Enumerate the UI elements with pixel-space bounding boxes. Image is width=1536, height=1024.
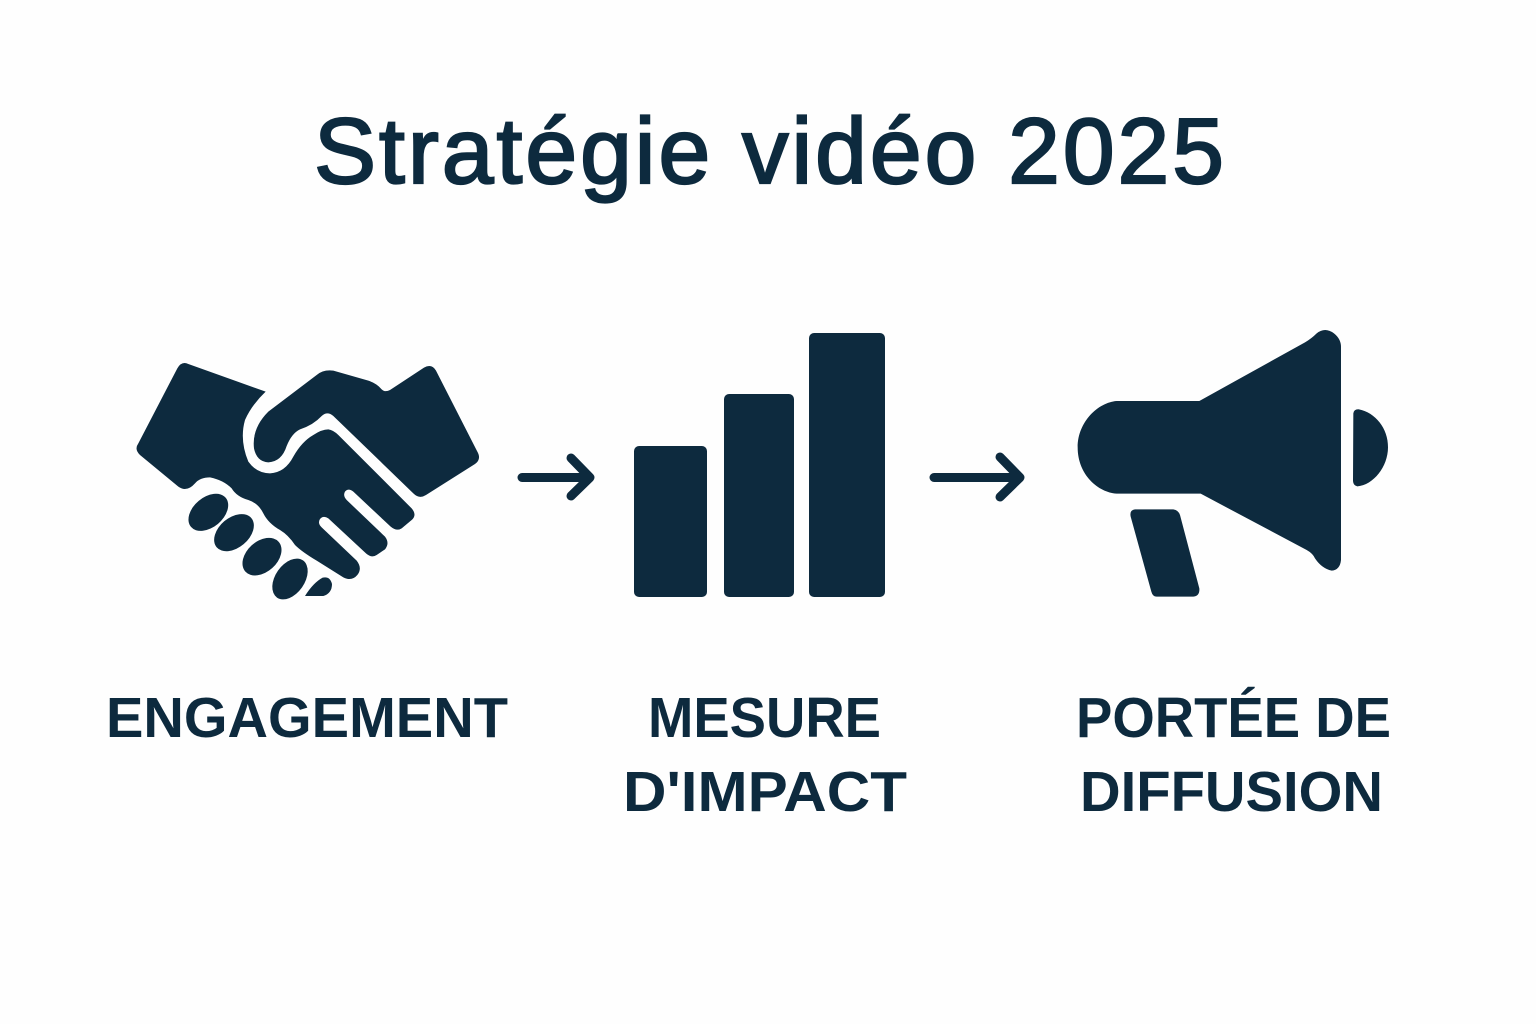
icon: handshake [137, 363, 479, 606]
arrow: engagement to impact [522, 458, 590, 496]
title: Stratégie vidéo 2025 [314, 99, 1224, 203]
finger 1 [181, 486, 235, 538]
arrow: impact to reach [934, 457, 1020, 497]
finger 2 [207, 507, 261, 559]
bar small [634, 446, 707, 597]
label: mesure d'impact: D'IMPACT [623, 760, 907, 824]
bar tall [809, 333, 885, 597]
icon: megaphone [1078, 330, 1388, 597]
bar medium [724, 394, 794, 597]
finger 5 [305, 577, 332, 596]
label: portée de diffusion [1076, 686, 1391, 824]
megaphone body [1078, 330, 1341, 571]
label: portée de diffusion: DIFFUSION [1080, 760, 1383, 824]
label: mesure d'impact: MESURE [648, 686, 881, 750]
label: engagement: ENGAGEMENT [106, 686, 508, 750]
finger 3 [235, 530, 289, 583]
left cuff and lower hand [137, 363, 414, 579]
megaphone sound wave [1353, 409, 1388, 486]
label: mesure d'impact [623, 686, 907, 824]
megaphone handle [1130, 509, 1199, 597]
right cuff and upper hand [254, 366, 479, 497]
icon: bar chart [634, 333, 885, 597]
finger 4 [265, 552, 315, 606]
label: portée de diffusion: PORTÉE DE [1076, 686, 1391, 750]
